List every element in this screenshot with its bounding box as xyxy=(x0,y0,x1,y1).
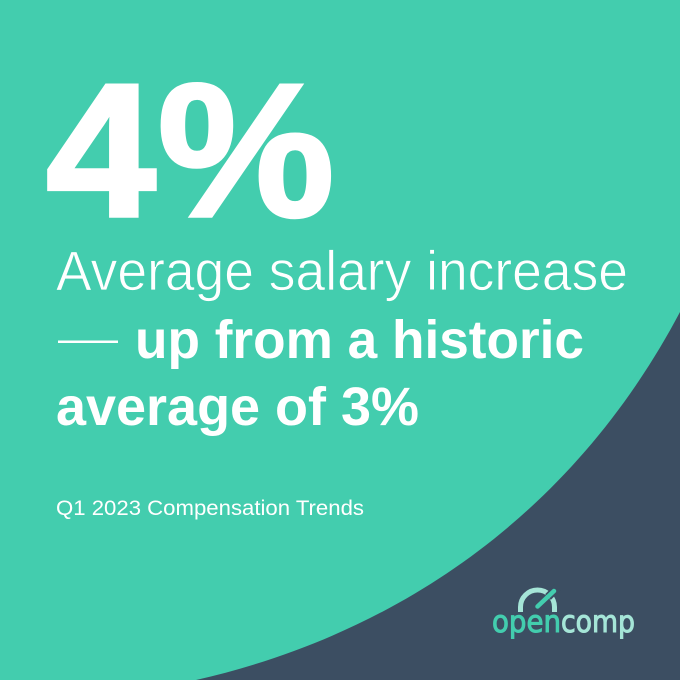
icon: gauge xyxy=(520,587,558,612)
dark corner curve xyxy=(196,312,680,680)
logo: opencomp xyxy=(492,587,635,640)
wordmark xyxy=(492,605,635,640)
bold phrase: up from a historic xyxy=(135,310,584,370)
line: average salary increase: Average salary increase xyxy=(56,239,628,302)
wordmark: open: open xyxy=(492,605,561,640)
needle gap xyxy=(548,587,558,597)
wordmark: comp: comp xyxy=(561,605,635,640)
source caption: Q1 2023 Compensation Trends xyxy=(56,497,364,520)
headline number xyxy=(46,45,334,257)
statement text xyxy=(56,239,628,437)
gauge needle xyxy=(538,591,554,606)
line: average of 3%: average of 3% xyxy=(56,377,419,437)
gauge arc xyxy=(520,590,554,612)
em dash xyxy=(58,340,118,343)
percent sign: % xyxy=(158,45,334,257)
digit 4: 4 xyxy=(46,45,156,257)
